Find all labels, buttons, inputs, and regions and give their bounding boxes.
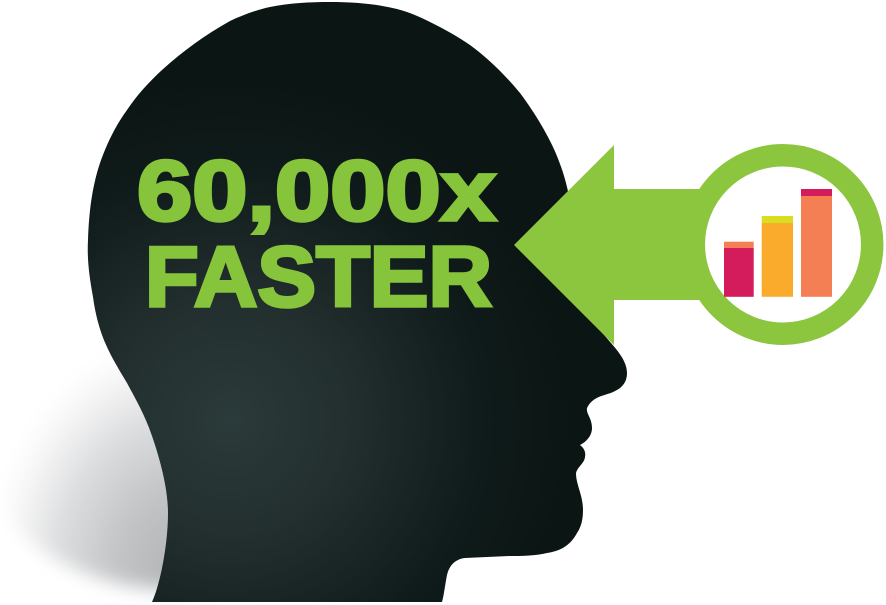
head silhouette	[88, 2, 627, 602]
headline: FASTER: FASTER	[145, 230, 492, 325]
bar 1	[724, 242, 754, 297]
arrow pointing to the head	[514, 145, 720, 345]
headline: 60,000x: 60,000x	[137, 144, 496, 239]
magnifier ring	[694, 155, 872, 334]
bar 3	[801, 189, 832, 297]
bar 2	[762, 216, 793, 297]
magnifier circle with bar chart	[694, 155, 872, 334]
head shadow	[0, 350, 365, 590]
